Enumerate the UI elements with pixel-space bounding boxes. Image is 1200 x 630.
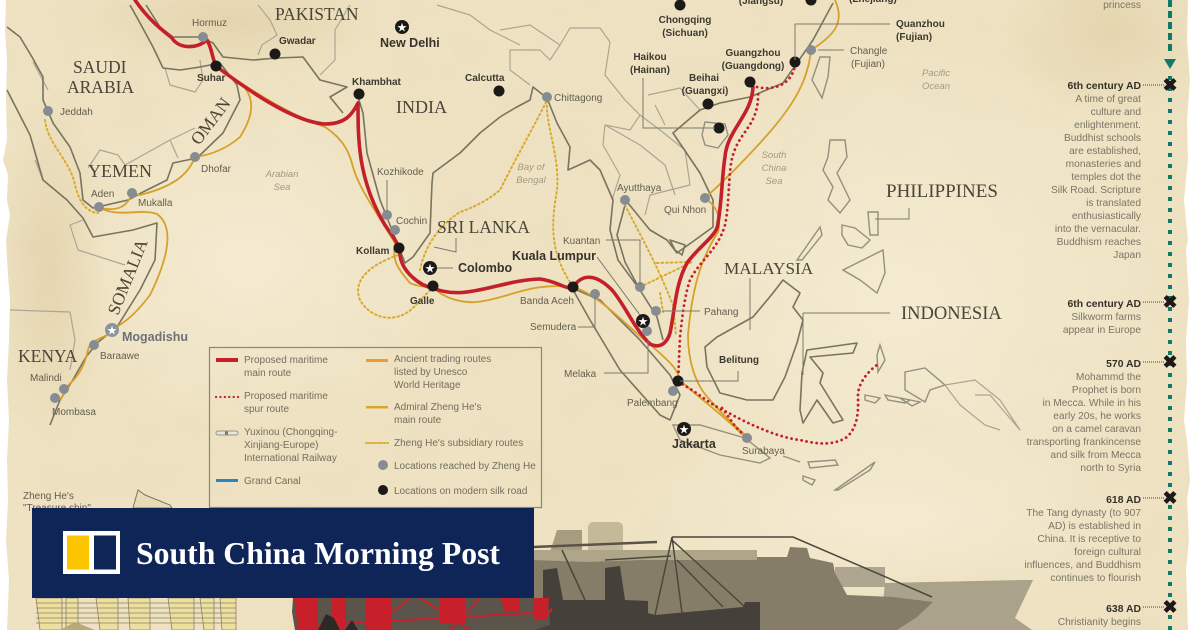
timeline entry: 6th century culture: ✖ bbox=[1162, 75, 1178, 95]
ship silhouettes bbox=[36, 490, 1033, 630]
timeline entry: 618 AD: foreign cultural bbox=[1074, 547, 1141, 558]
Zheng He location labels: (Fujian) bbox=[851, 59, 885, 70]
timeline: dashed green line bbox=[1164, 0, 1176, 630]
country names: INDIA bbox=[396, 97, 447, 117]
modern silk road city labels: Calcutta bbox=[465, 73, 505, 84]
legend: railway: International Railway bbox=[244, 453, 337, 464]
route: Zheng He east route bbox=[688, 0, 839, 435]
modern silk road city labels: Suhar bbox=[197, 73, 225, 84]
timeline entry: 6th century culture: enlightenment. bbox=[1074, 120, 1141, 131]
markers: locations on modern silk road bbox=[210, 0, 816, 386]
Zheng He location labels: Aden bbox=[91, 189, 114, 200]
timeline entry: 618 AD bbox=[1024, 488, 1178, 584]
modern silk road city labels: Haikou bbox=[633, 52, 667, 63]
Zheng He location labels: Kuantan bbox=[563, 236, 600, 247]
country names: PAKISTAN bbox=[275, 4, 359, 24]
Zheng He location labels: Baraawe bbox=[100, 351, 140, 362]
sea labels bbox=[265, 68, 950, 193]
modern silk road city labels: (Sichuan) bbox=[662, 28, 708, 39]
legend: railway: Yuxinou (Chongqing- bbox=[244, 427, 337, 438]
timeline entry: 638 AD: 638 AD bbox=[1106, 604, 1141, 615]
Zheng He location labels bbox=[30, 18, 888, 457]
Zheng He location labels: Dhofar bbox=[201, 164, 232, 175]
sea labels: China bbox=[762, 163, 786, 174]
timeline entry: 618 AD: The Tang dynasty (to 907 bbox=[1026, 508, 1141, 519]
legend: railway: Xinjiang-Europe) bbox=[244, 440, 318, 451]
modern silk road city labels: Guangzhou bbox=[726, 48, 780, 59]
timeline entry: 6th century culture: Japan bbox=[1113, 250, 1141, 261]
modern silk road city labels: (Fujian) bbox=[896, 32, 932, 43]
map: proposed maritime spur routes bbox=[678, 66, 877, 443]
capital labels: New Delhi bbox=[380, 36, 440, 50]
Zheng He location labels: Ayutthaya bbox=[617, 183, 662, 194]
Zheng He location labels: Surabaya bbox=[742, 446, 785, 457]
sea labels: Bay of bbox=[518, 162, 546, 173]
timeline entry: 570 AD: Mohammd the bbox=[1076, 372, 1141, 383]
markers: capital stars: ★ bbox=[107, 324, 117, 338]
Zheng He location labels: Mombasa bbox=[52, 407, 96, 418]
modern silk road city labels: (Guangxi) bbox=[682, 86, 728, 97]
modern silk road city labels: Gwadar bbox=[279, 36, 316, 47]
legend: grand canal bbox=[216, 476, 301, 487]
caption: treasure ship bbox=[23, 491, 91, 514]
timeline entry: 6th century culture bbox=[1051, 75, 1178, 261]
map: location markers bbox=[43, 0, 816, 443]
Zheng He location labels: Changle bbox=[850, 46, 888, 57]
modern silk road city labels: Kollam bbox=[356, 246, 389, 257]
legend: proposed main route: Proposed maritime bbox=[244, 355, 328, 366]
sea labels: Sea bbox=[274, 182, 290, 193]
timeline entry: 6th century culture: Silk Road. Scripture bbox=[1051, 185, 1141, 196]
sea labels: Arabian bbox=[265, 169, 298, 180]
Zheng He location labels: Banda Aceh bbox=[520, 296, 574, 307]
legend: Zheng He main route bbox=[366, 402, 482, 426]
timeline: top entry end: princess bbox=[1103, 0, 1141, 11]
timeline entry: 570 AD: and silk from Mecca bbox=[1050, 450, 1141, 461]
country names bbox=[18, 4, 1002, 366]
timeline entry: 570 AD: north to Syria bbox=[1080, 463, 1141, 474]
timeline entry: 570 AD: transporting frankincense bbox=[1027, 437, 1141, 448]
modern silk road city labels: Khambhat bbox=[352, 77, 402, 88]
timeline entry: 6th century culture: is translated bbox=[1086, 198, 1141, 209]
Zheng He location labels: Hormuz bbox=[192, 18, 227, 29]
timeline entry: silkworm farms: Silkworm farms bbox=[1071, 312, 1141, 323]
timeline entry: 6th century culture: Buddhist schools bbox=[1064, 133, 1141, 144]
capital labels: Mogadishu bbox=[122, 330, 188, 344]
Zheng He location labels: Cochin bbox=[396, 216, 427, 227]
country names: MALAYSIA bbox=[724, 259, 814, 278]
Zheng He location labels: Palembang bbox=[627, 398, 678, 409]
timeline entry: 570 AD: on a camel caravan bbox=[1052, 424, 1141, 435]
modern silk road city labels: Belitung bbox=[719, 355, 759, 366]
Zheng He location labels: Pahang bbox=[704, 307, 738, 318]
timeline entry: 6th century culture: 6th century AD bbox=[1067, 81, 1141, 92]
country names: PHILIPPINES bbox=[886, 181, 998, 202]
SCMP logo bbox=[63, 531, 120, 574]
legend: ancient trading routes bbox=[366, 354, 491, 391]
markers: capital stars: ★ bbox=[425, 262, 435, 276]
timeline entry: 6th century culture: monasteries and bbox=[1066, 159, 1141, 170]
modern silk road city labels bbox=[197, 0, 945, 366]
legend: grand canal: Grand Canal bbox=[244, 476, 301, 487]
Zheng He location labels: Chittagong bbox=[554, 93, 602, 104]
legend: proposed spur route: spur route bbox=[244, 404, 289, 415]
legend: Zheng He main route: Admiral Zheng He's bbox=[394, 402, 482, 413]
timeline entry: 6th century culture: culture and bbox=[1091, 107, 1141, 118]
route: Zheng He subsidiary routes bbox=[45, 100, 692, 335]
sea labels: Sea bbox=[766, 176, 782, 187]
legend: ancient trading routes: Ancient trading routes bbox=[394, 354, 491, 365]
legend: railway bbox=[216, 427, 337, 464]
country names: SAUDI bbox=[73, 57, 127, 77]
modern silk road city labels: Chongqing bbox=[659, 15, 711, 26]
legend: ancient trading routes: World Heritage bbox=[394, 380, 461, 391]
Zheng He location labels: Semudera bbox=[530, 322, 577, 333]
map: leader lines bbox=[387, 24, 909, 381]
sea labels: Pacific bbox=[922, 68, 950, 79]
sea labels: Ocean bbox=[922, 81, 950, 92]
legend: subsidiary routes: Zheng He's subsidiary routes bbox=[394, 438, 523, 449]
map: place labels bbox=[18, 0, 1002, 457]
timeline entry: 570 AD: early 20s, he works bbox=[1053, 411, 1141, 422]
sea labels: South bbox=[762, 150, 786, 161]
country names: INDONESIA bbox=[901, 304, 1002, 324]
timeline entry: 618 AD: ✖ bbox=[1162, 488, 1178, 508]
legend: ancient trading routes: listed by Unesco bbox=[394, 367, 468, 378]
timeline entry: 638 AD: ✖ bbox=[1162, 597, 1178, 617]
timeline entry: silkworm farms bbox=[1063, 292, 1178, 336]
SCMP wordmark: South China Morning Post bbox=[136, 535, 500, 571]
legend: proposed main route bbox=[216, 355, 328, 379]
sea labels: Bengal bbox=[516, 175, 547, 186]
timeline entry: silkworm farms: appear in Europe bbox=[1063, 325, 1141, 336]
Zheng He location labels: Mukalla bbox=[138, 198, 173, 209]
timeline entry: 6th century culture: A time of great bbox=[1075, 94, 1141, 105]
markers: capital stars: ★ bbox=[397, 20, 407, 34]
Zheng He location labels: Qui Nhon bbox=[664, 205, 706, 216]
Zheng He location labels: Jeddah bbox=[60, 107, 93, 118]
Zheng He location labels: Melaka bbox=[564, 369, 597, 380]
country names: KENYA bbox=[18, 346, 78, 366]
timeline entry: 618 AD: China. It is receptive to bbox=[1037, 534, 1141, 545]
treasure ship bbox=[36, 490, 236, 630]
ship masts and rigging bbox=[562, 537, 932, 615]
Zheng He location labels: Kozhikode bbox=[377, 167, 424, 178]
timeline entry: 638 AD bbox=[1058, 597, 1178, 628]
timeline entry: 570 AD: ✖ bbox=[1162, 352, 1178, 372]
timeline entry: 6th century culture: Buddhism reaches bbox=[1057, 237, 1141, 248]
timeline entry: 570 AD: in Mecca. While in his bbox=[1042, 398, 1141, 409]
timeline entry: 6th century culture: into the vernacular. bbox=[1055, 224, 1141, 235]
map: land outlines bbox=[7, 3, 1020, 490]
markers: capital stars: ★ bbox=[679, 422, 689, 436]
timeline entry: 618 AD: continues to flourish bbox=[1050, 573, 1141, 584]
legend: Zheng He main route: main route bbox=[394, 415, 442, 426]
middle ship bbox=[533, 547, 933, 630]
timeline entry: 638 AD: Christianity begins bbox=[1058, 617, 1141, 628]
modern silk road city labels: Galle bbox=[410, 296, 435, 307]
caption: treasure ship: "Treasure ship" bbox=[23, 503, 91, 514]
timeline entry: 6th century culture: enthusiastically bbox=[1072, 211, 1142, 222]
country names: SRI LANKA bbox=[437, 217, 530, 237]
far ship bbox=[880, 580, 1033, 630]
markers: capital stars bbox=[105, 20, 691, 436]
markers: capital stars: ★ bbox=[638, 314, 648, 328]
timeline entry: 570 AD bbox=[1027, 352, 1178, 474]
legend: modern silk road locations: Locations on modern silk road bbox=[394, 486, 527, 497]
modern silk road city labels: Beihai bbox=[689, 73, 719, 84]
timeline entry: silkworm farms: ✖ bbox=[1162, 292, 1178, 312]
legend: proposed main route: main route bbox=[244, 368, 292, 379]
country names: YEMEN bbox=[88, 161, 152, 181]
modern silk road city labels: (Guangdong) bbox=[722, 61, 784, 72]
near dark ship bbox=[534, 566, 760, 630]
map: Zheng He routes bbox=[45, 0, 839, 437]
route: Zheng He main route bbox=[52, 66, 745, 437]
country names: ARABIA bbox=[67, 77, 134, 97]
country names: OMAN bbox=[186, 93, 235, 148]
timeline column bbox=[1024, 0, 1178, 630]
modern silk road city labels: Quanzhou bbox=[896, 19, 945, 30]
map: proposed maritime main route bbox=[135, 0, 753, 346]
legend: proposed spur route: Proposed maritime bbox=[244, 391, 328, 402]
SCMP banner bbox=[32, 508, 534, 598]
timeline entry: 618 AD: 618 AD bbox=[1106, 495, 1141, 506]
country names: SOMALIA bbox=[103, 236, 152, 317]
caption: treasure ship: Zheng He's bbox=[23, 491, 74, 502]
timeline entry: 570 AD: Prophet is born bbox=[1072, 385, 1141, 396]
timeline entry: 618 AD: influences, and Buddhism bbox=[1024, 560, 1141, 571]
capital labels: Jakarta bbox=[672, 437, 717, 451]
capital labels: Kuala Lumpur bbox=[512, 249, 596, 263]
modern silk road city labels: (Hainan) bbox=[630, 65, 670, 76]
timeline entry: 6th century culture: are established, bbox=[1069, 146, 1141, 157]
timeline entry: silkworm farms: 6th century AD bbox=[1067, 299, 1141, 310]
legend: locations reached: Locations reached by Zheng He bbox=[394, 461, 536, 472]
legend panel bbox=[210, 348, 542, 508]
red junk bbox=[292, 598, 552, 630]
timeline entry: 6th century culture: temples dot the bbox=[1071, 172, 1141, 183]
markers: locations reached by Zheng He bbox=[43, 32, 816, 443]
legend: proposed spur route bbox=[216, 391, 328, 415]
timeline entry: 570 AD: 570 AD bbox=[1106, 359, 1141, 370]
capital labels: Colombo bbox=[458, 261, 513, 275]
capital labels bbox=[122, 36, 717, 451]
timeline entry: 618 AD: AD) is established in bbox=[1048, 521, 1141, 532]
Zheng He location labels: Malindi bbox=[30, 373, 62, 384]
